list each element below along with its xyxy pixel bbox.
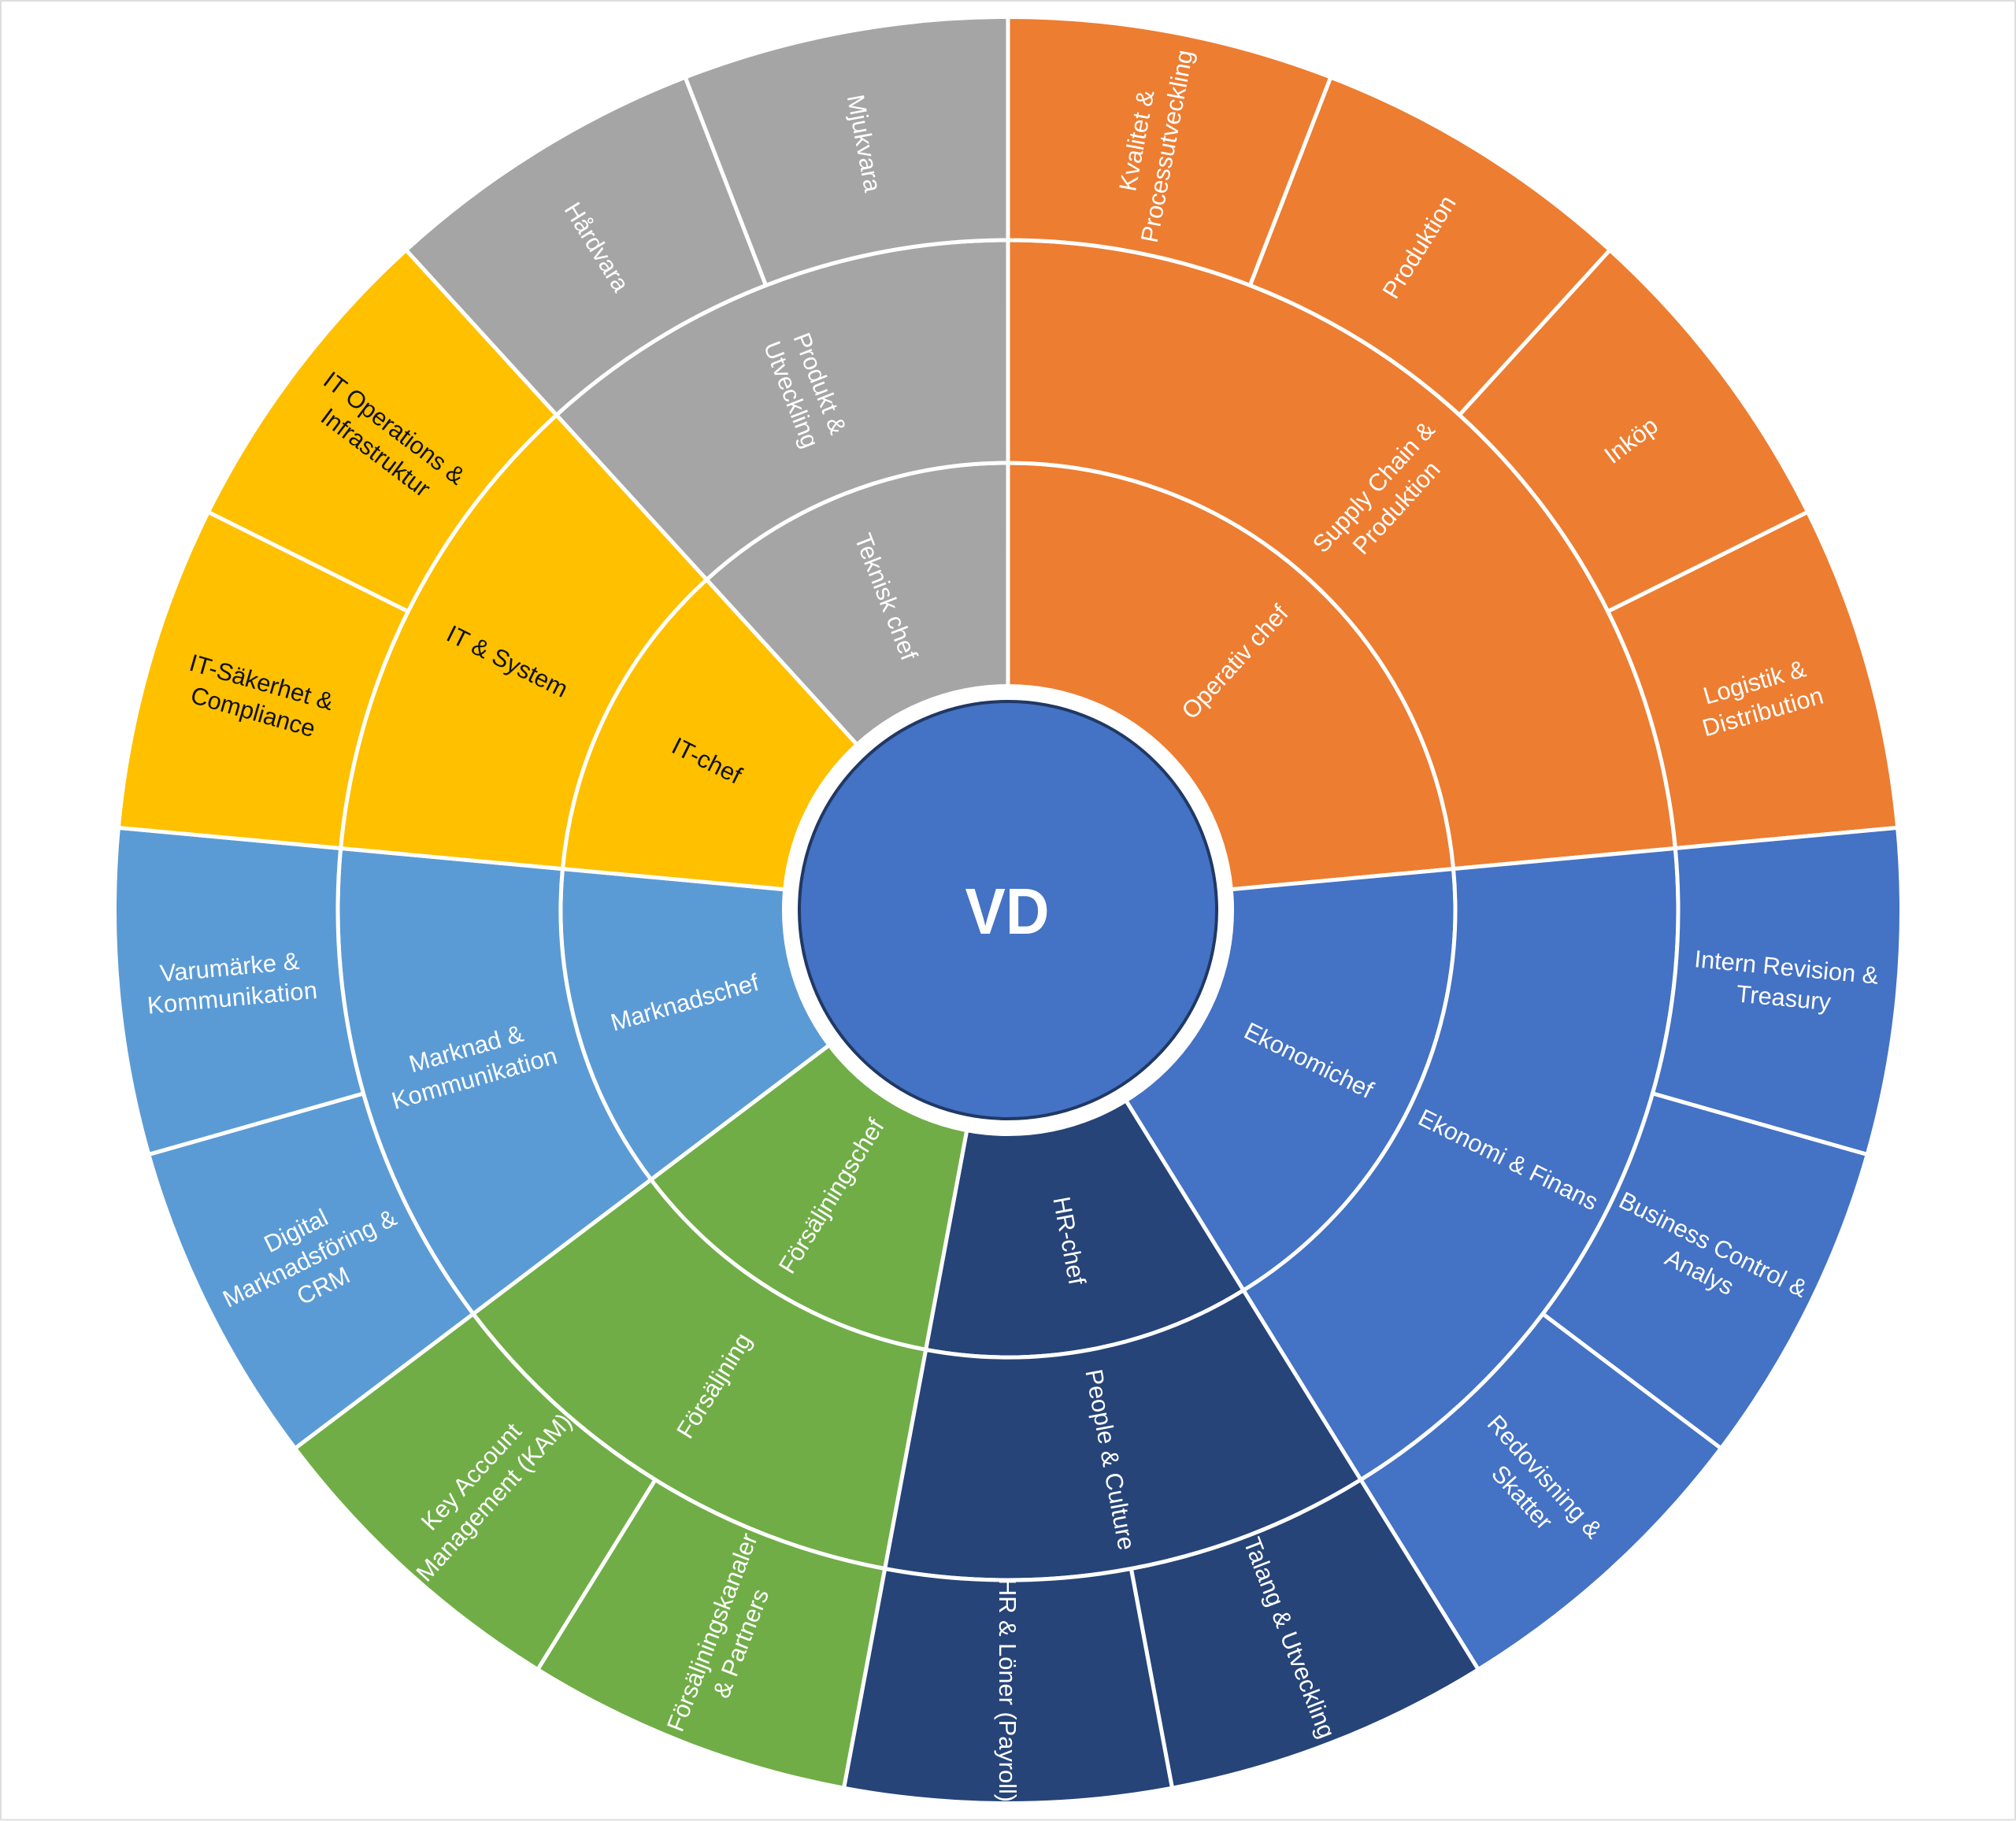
center node: VD: VD	[965, 875, 1049, 948]
label: Supply Chain & Produktion: Supply Chain &	[1307, 416, 1440, 558]
label: People & Culture: People & Culture	[1080, 1367, 1141, 1553]
segment: Digital Marknadsföring & CRM	[101, 1029, 510, 1449]
label: Marknad & Kommunikation: Marknad &	[406, 1020, 527, 1078]
segment: Business Control & Analys	[1521, 1081, 1867, 1465]
segment: IT-Säkerhet & Compliance	[118, 506, 416, 853]
panel: Ekonomichef branch (blue)	[1107, 827, 1927, 1706]
label: Redovisning & Skatter: Skatter	[1486, 1460, 1558, 1535]
label: Business Control & Analys: Analys	[1661, 1243, 1738, 1301]
label: Logistik & Distribution: Distribution	[1699, 682, 1827, 742]
segment: Talang & Utveckling	[1062, 1442, 1478, 1821]
segment: Ekonomi & Finans	[1206, 848, 1731, 1489]
label: Produkt & Utveckling: Utveckling	[758, 338, 825, 452]
segment: HR & Löner (Payroll)	[806, 1524, 1172, 1821]
label: IT Operations & Infrastruktur: IT Operations &	[318, 366, 470, 490]
label: IT-Säkerhet & Compliance: IT-Säkerhet &	[187, 649, 337, 716]
label: Hårdvara: Hårdvara	[559, 198, 636, 297]
segment: Supply Chain & Produktion	[1008, 240, 1675, 869]
label: Inköp: Inköp	[1599, 412, 1663, 469]
label: Teknisk chef: Teknisk chef	[849, 530, 923, 664]
segment: Mjukvara	[685, 0, 1083, 328]
label: Supply Chain & Produktion: Produktion	[1347, 456, 1446, 560]
label: Business Control & Analys: Business Control &	[1615, 1186, 1812, 1303]
label: Intern Revision & Treasury: Intern Revision &	[1693, 945, 1880, 990]
label: IT-Säkerhet & Compliance: Compliance	[187, 681, 318, 742]
segment: Försäljningschef	[629, 1017, 977, 1349]
segment: Varumärke & Kommunikation	[61, 771, 407, 1154]
segment: IT-chef	[562, 569, 871, 895]
segment: Produkt & Utveckling	[557, 111, 1119, 666]
segment: IT & System	[341, 399, 721, 879]
segment: HR-chef	[839, 1050, 1243, 1449]
panel: Operativ chef branch (orange)	[1008, 17, 1951, 920]
label: Försäljningskanaler & Partners: & Partners	[707, 1585, 774, 1701]
label: Ekonomi & Finans: Ekonomi & Finans	[1414, 1104, 1603, 1216]
label: IT-chef: IT-chef	[668, 731, 747, 790]
label: Marknad & Kommunikation: Kommunikation	[389, 1042, 561, 1115]
segment: Marknadschef	[469, 769, 876, 1179]
label: Marknadschef: Marknadschef	[608, 968, 762, 1037]
label: Varumärke & Kommunikation: Varumärke &	[159, 947, 301, 987]
label: HR-chef: HR-chef	[1047, 1194, 1091, 1287]
segment: Teknisk chef	[706, 376, 1119, 788]
label: Digital Marknadsföring & CRM: CRM	[292, 1261, 354, 1310]
label: Logistik & Distribution: Logistik &	[1700, 654, 1809, 710]
label: Key Account Management (KAM): Management (KAM)	[410, 1408, 577, 1586]
panel: Försäljningschef branch (green)	[263, 1017, 977, 1788]
segment: Intern Revision & Treasury	[1630, 827, 1927, 1174]
segment: Produktion	[1234, 77, 1632, 444]
label: Talang & Utveckling: Talang & Utveckling	[1238, 1534, 1341, 1742]
panel: Teknisk chef branch (gray)	[406, 0, 1119, 788]
segment: Försäljningskanaler & Partners	[527, 1465, 893, 1788]
label: Kvalitet & Processutveckling: Processutveckling	[1136, 47, 1199, 245]
label: Digital Marknadsföring & CRM: Marknadsföring &	[218, 1204, 401, 1313]
label: Försäljningskanaler & Partners: Försäljningskanaler	[662, 1529, 763, 1735]
segment: IT Operations & Infrastruktur	[208, 223, 592, 631]
label: IT Operations & Infrastruktur: Infrastruktur	[316, 402, 435, 502]
labels: inner ring	[608, 530, 1378, 1287]
segment: Redovisning & Skatter	[1312, 1286, 1721, 1706]
segment: Ekonomichef	[1107, 869, 1490, 1300]
panel: Marknadschef branch (light blue)	[61, 749, 876, 1449]
label: Produkt & Utveckling: Produkt &	[788, 329, 852, 439]
label: Digital Marknadsföring & CRM: Digital	[260, 1204, 332, 1258]
center node: VD	[782, 684, 1234, 1136]
label: HR & Löner (Payroll): HR & Löner (Payroll)	[994, 1579, 1021, 1802]
segment: Kvalitet & Processutveckling	[1008, 17, 1331, 285]
segment: Operativ chef	[1008, 463, 1454, 890]
panel: HR-chef branch (navy)	[799, 1050, 1478, 1821]
segment: Marknad & Kommunikation	[201, 749, 744, 1314]
segment: People & Culture	[799, 1191, 1361, 1717]
label: Kvalitet & Processutveckling: Kvalitet &	[1114, 87, 1160, 194]
label: Produktion: Produktion	[1377, 191, 1462, 304]
label: Redovisning & Skatter: Redovisning &	[1482, 1409, 1608, 1544]
label: Key Account Management (KAM): Key Account	[416, 1417, 527, 1536]
labels: middle ring	[380, 327, 1603, 1553]
segment: Hårdvara	[406, 33, 825, 449]
label: Försäljning: Försäljning	[671, 1328, 757, 1443]
segment: Försäljning	[441, 1152, 947, 1569]
label: Ekonomichef: Ekonomichef	[1240, 1016, 1378, 1104]
label: Operativ chef: Operativ chef	[1176, 599, 1294, 724]
label: IT & System: IT & System	[443, 620, 573, 703]
panel: IT-chef branch (yellow)	[118, 223, 871, 895]
label: Mjukvara: Mjukvara	[842, 92, 887, 194]
segment: Key Account Management (KAM)	[263, 1271, 679, 1670]
label: Varumärke & Kommunikation: Kommunikation	[146, 976, 319, 1020]
segment: Inköp	[1429, 250, 1848, 666]
label: Intern Revision & Treasury: Treasury	[1735, 979, 1833, 1016]
label: Försäljningschef: Försäljningschef	[773, 1113, 890, 1279]
segment: Logistik & Distribution	[1567, 512, 1951, 920]
